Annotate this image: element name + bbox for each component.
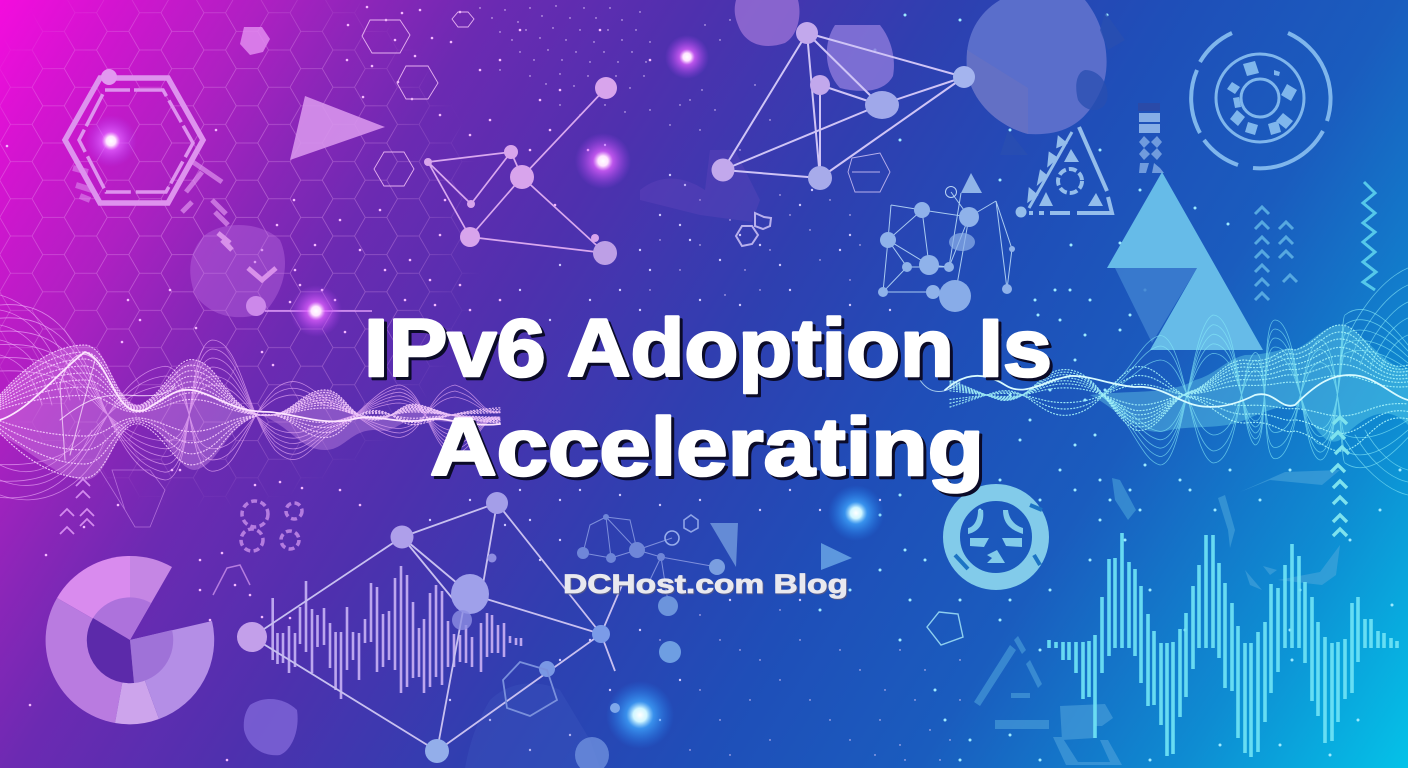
ring lower right	[281, 531, 299, 549]
triangle left bar	[974, 645, 1016, 706]
dim rounded square	[1060, 704, 1113, 740]
blob: bottom left small	[244, 699, 298, 755]
icon: concentric target emblem	[1191, 33, 1331, 168]
arc fragment left	[1218, 495, 1235, 548]
cluster lines	[583, 517, 717, 602]
emblem right line	[1079, 127, 1107, 191]
outline hexagon d	[452, 12, 474, 27]
scattered fragments	[1112, 478, 1277, 590]
chevrons left column	[1255, 207, 1269, 300]
hexagon inner dashed outline	[79, 90, 193, 192]
triangle base	[995, 693, 1049, 729]
network outline hexagon	[503, 662, 557, 716]
donut hole	[87, 618, 134, 683]
small outline pentagon	[927, 612, 963, 645]
donut chart graphic	[46, 556, 214, 724]
ring cuts	[955, 505, 1042, 569]
inner cross shapes	[968, 510, 1023, 563]
waveform ribbon right	[920, 268, 1408, 495]
star field: fine dense dust	[480, 6, 960, 760]
molecule lines	[883, 192, 1012, 296]
node on hexagon corner	[101, 69, 117, 85]
title line 1: IPv6 Adoption Is	[364, 303, 1052, 394]
target inner ring	[1241, 79, 1279, 117]
dark top bar	[1138, 103, 1160, 111]
big stacked triangle	[1107, 172, 1263, 350]
blob: large disc facet	[967, 50, 1028, 134]
zigzag line far right	[1363, 182, 1376, 290]
title	[364, 303, 1052, 493]
dashed rings cluster	[213, 501, 302, 595]
target outer broken ring	[1191, 33, 1331, 168]
thin contour family	[1100, 309, 1408, 468]
network nodes	[424, 77, 617, 265]
cluster ring	[665, 531, 679, 545]
network: upper centre constellation	[712, 22, 975, 190]
blob: large top right disc	[967, 0, 1107, 134]
triangle: centre play	[821, 543, 852, 570]
network: small centre cluster	[577, 514, 725, 663]
network: molecule cluster	[878, 173, 1015, 312]
soft blobs behind networks	[190, 0, 1125, 768]
ring top left	[242, 501, 268, 527]
triangle right dashes	[1014, 636, 1042, 688]
star field: cyan dots	[820, 15, 1400, 760]
network lines	[428, 88, 606, 253]
lower hollow triangle	[1053, 737, 1122, 765]
darker inverted triangle	[1115, 268, 1197, 343]
icon: pale triangle	[290, 96, 385, 160]
thin contour family	[0, 305, 500, 498]
emblem small triangles	[1039, 149, 1103, 206]
dim triangle emblem bottom right	[974, 636, 1122, 765]
emblem bottom dash	[1029, 197, 1112, 213]
blob: bottom faint arm	[465, 683, 600, 768]
subtitle: DCHost.com Blog	[563, 569, 848, 599]
light triangle	[1107, 172, 1263, 350]
waveform ribbon left	[0, 295, 500, 500]
emblem left line	[1029, 132, 1072, 208]
network lines	[252, 503, 622, 751]
inner lower sector	[130, 630, 173, 683]
emblem node	[1016, 206, 1026, 218]
dim shapes above equalizer	[1112, 470, 1340, 590]
right chevrons	[76, 479, 94, 526]
glow: top centre star	[665, 35, 709, 79]
icon: lilac node under blob	[246, 296, 266, 316]
network nodes	[237, 492, 620, 763]
large left sector	[46, 598, 130, 723]
icon: dashed triangle emblem	[1016, 127, 1112, 218]
target middle ring	[1216, 54, 1304, 142]
lilac bars	[1139, 113, 1160, 133]
ring band	[952, 492, 1040, 582]
right sector	[130, 621, 214, 719]
small hex chain	[213, 565, 250, 595]
chevrons	[1331, 417, 1349, 536]
ring a	[755, 213, 771, 229]
chevron column upper right	[1255, 207, 1297, 300]
streak line	[265, 310, 372, 312]
glow: horizontal streak star	[265, 285, 372, 337]
top left sector	[57, 556, 130, 640]
chevron column lower right	[1331, 417, 1349, 536]
chevron pair	[218, 233, 276, 280]
inner upper sector	[93, 597, 151, 640]
glow: upper centre star	[575, 133, 631, 189]
broken chevron fragments	[182, 160, 228, 225]
left chevrons	[60, 509, 74, 534]
outline hexagons lower left	[100, 470, 165, 527]
icon: cyan ring emblem	[952, 492, 1042, 582]
bottom bright sector	[115, 640, 159, 724]
cluster small hexagon	[684, 515, 698, 532]
glow: hexagon star	[85, 115, 137, 167]
molecule triangle	[961, 173, 982, 193]
diamonds	[1139, 136, 1164, 173]
network nodes	[712, 22, 975, 190]
honeycomb hexagon grid	[0, 0, 469, 496]
blob: left lilac rounded	[190, 225, 285, 317]
top right sector	[130, 556, 172, 640]
ribbon mesh fill	[1090, 325, 1408, 442]
dotted mesh family	[0, 345, 500, 478]
cluster nodes	[577, 514, 725, 663]
arc fragment right	[1278, 545, 1340, 585]
blob: dark shapes by disc	[1000, 12, 1125, 155]
blob: top centre right	[827, 25, 894, 91]
blob: bottom disc	[575, 737, 609, 768]
star field: lilac-blue mid dots	[430, 145, 890, 750]
ring top right	[286, 503, 302, 519]
ring lower left	[241, 529, 263, 551]
equalizer bars left	[273, 566, 521, 699]
arc contours far left	[0, 295, 105, 500]
ring b	[736, 226, 758, 246]
blob: top centre lilac	[735, 0, 799, 46]
title line 2: Accelerating	[430, 402, 984, 493]
chevrons right column	[1279, 222, 1297, 282]
lower left fragments	[73, 168, 92, 200]
equalizer bars right	[1049, 533, 1397, 757]
bright wave strands	[0, 352, 500, 460]
small ring hexagons in centre	[736, 153, 890, 246]
triangle: centre tall	[710, 523, 738, 567]
emblem inner dashed ring	[1058, 169, 1082, 193]
hexagon outer outline	[65, 78, 203, 203]
network: lower left constellation	[237, 492, 622, 763]
star field: pink dots	[7, 7, 650, 760]
icon: stacked bars and diamonds	[1138, 103, 1164, 173]
glow: blue star centre right	[828, 485, 884, 541]
outline hexagon c	[362, 20, 410, 53]
chevron column lower left	[60, 479, 94, 534]
arc fragment top	[1240, 470, 1340, 492]
outline cluster	[848, 153, 890, 192]
bright wave strands	[920, 375, 1408, 407]
arc contours far right	[1340, 268, 1408, 495]
outline hexagon a	[374, 152, 414, 186]
network: upper left constellation	[424, 77, 617, 265]
glow: blue star bottom	[606, 681, 674, 749]
blob: mid violet haze	[640, 150, 760, 222]
emblem square dashes	[1029, 138, 1065, 200]
molecule nodes	[878, 202, 1015, 312]
small outline hexagons near top	[362, 12, 474, 186]
dotted mesh family	[950, 325, 1408, 451]
ribbon mesh fill	[0, 345, 500, 480]
icon: small hexagon node	[240, 27, 270, 55]
molecule ring	[946, 186, 956, 198]
icon: top-left hexagon frame	[65, 69, 228, 225]
outline hexagon b	[397, 66, 438, 99]
target ring segments	[1227, 61, 1297, 135]
icon: chevrons in left blob	[218, 233, 276, 280]
network lines	[723, 33, 964, 178]
